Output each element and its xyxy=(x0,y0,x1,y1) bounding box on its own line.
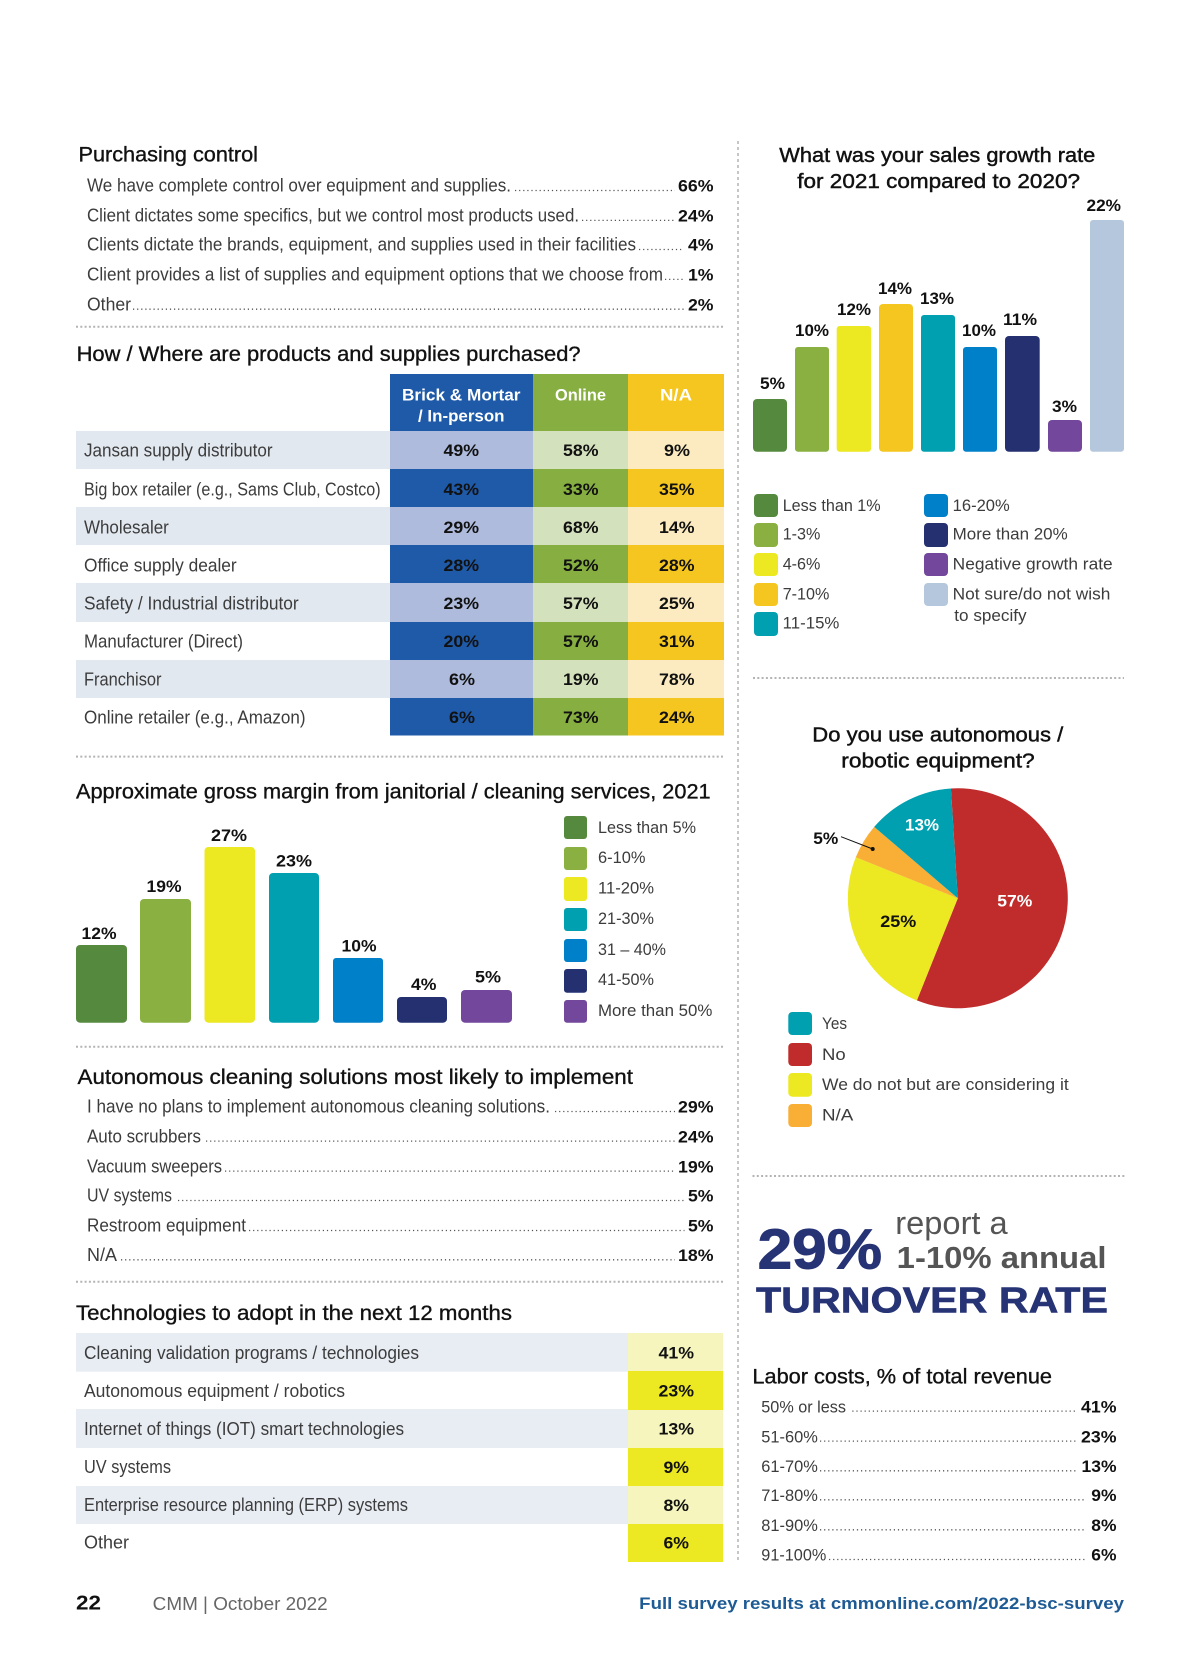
table row: wholesaler: Wholesaler xyxy=(84,518,169,538)
row: client provides a list 1%: 1% xyxy=(688,266,714,285)
legend: sales growth: 16-20% xyxy=(953,497,1010,515)
panel: labor costs xyxy=(752,1365,1116,1565)
table row: online retailer: 24% xyxy=(659,708,694,727)
panel: sales growth rate xyxy=(753,144,1124,636)
footer: issue: CMM | October 2022 xyxy=(153,1594,328,1614)
table header: brick and mortar xyxy=(390,374,533,431)
table row: wholesaler xyxy=(76,507,724,545)
legend: gross margin: More than 50% xyxy=(598,1002,713,1020)
row: n/a 18%: 18% xyxy=(678,1246,714,1265)
bar chart: gross margin: 12% xyxy=(82,924,116,943)
bar chart: gross margin: 10% xyxy=(342,937,376,956)
table row: jansan supply distributor: 49% xyxy=(444,441,479,460)
legend: autonomous equipment xyxy=(788,1012,1069,1127)
legend: sales growth xyxy=(754,494,1113,636)
table row: cleaning validation 41%: Cleaning validation programs / technologies xyxy=(84,1343,419,1363)
table row: safety / industrial distributor xyxy=(76,583,724,622)
row: 61-70% 13%: 13% xyxy=(1082,1457,1116,1476)
row: other 2%: Other xyxy=(87,294,131,314)
row: uv systems 5%: 5% xyxy=(688,1187,714,1206)
panel: gross margin xyxy=(76,780,713,1023)
bar chart: gross margin xyxy=(76,826,512,1023)
bar chart: sales growth xyxy=(753,196,1124,452)
pie chart: autonomous equipment: 57% xyxy=(997,891,1032,910)
table row: wholesaler: 68% xyxy=(563,518,598,537)
bar chart: sales growth: 12% xyxy=(837,300,871,319)
table row: office supply dealer: 28% xyxy=(659,556,694,575)
legend: gross margin: 11-20% xyxy=(598,880,654,898)
heading: purchasing control: Purchasing control xyxy=(78,143,258,166)
legend: sales growth: 4-6% xyxy=(783,556,821,574)
table row: erp systems 8%: Enterprise resource planning (ERP) systems xyxy=(84,1495,408,1515)
row: restroom equipment 5%: 5% xyxy=(688,1217,714,1236)
bar chart: sales growth: 11% xyxy=(1003,310,1037,329)
legend: sales growth: 1-3% xyxy=(783,526,821,544)
table row: big box retailer xyxy=(84,469,724,507)
heading: autonomous equipment: robotic equipment? xyxy=(841,749,1035,772)
table row: autonomous equipment 23% xyxy=(84,1371,723,1410)
row: client provides a list 1%: Client provides a list of supplies and equipment options that we choose from xyxy=(87,265,663,285)
row: 91-100% 6%: 6% xyxy=(1091,1546,1116,1565)
table header: n/a: N/A xyxy=(660,386,692,404)
row: 51-60% 23%: 23% xyxy=(1081,1427,1116,1446)
pie chart: autonomous equipment: 13% xyxy=(905,816,939,835)
bar chart: sales growth: 10% xyxy=(795,321,829,340)
pie chart: autonomous equipment: 25% xyxy=(880,912,916,931)
table row: franchisor xyxy=(76,660,724,698)
bar chart: gross margin: 4% xyxy=(411,975,436,994)
table row: big box retailer: 33% xyxy=(563,480,598,499)
row: no plans 29%: I have no plans to implement autonomous cleaning solutions. xyxy=(87,1097,550,1117)
table row: big box retailer: 43% xyxy=(444,480,479,499)
bar chart: gross margin: 5% xyxy=(475,968,501,987)
legend: gross margin: Less than 5% xyxy=(598,819,696,837)
table row: internet of things 13% xyxy=(76,1409,723,1448)
table row: safety / industrial distributor: 57% xyxy=(563,594,598,613)
row: 71-80% 9%: 9% xyxy=(1091,1486,1116,1505)
heading: sales growth rate: for 2021 compared to 2020? xyxy=(797,170,1080,193)
legend: gross margin xyxy=(564,816,713,1023)
row: client dictates some specifics 24%: Client dictates some specifics, but we control most products used. xyxy=(87,206,579,226)
legend: gross margin: 21-30% xyxy=(598,910,654,928)
table row: safety / industrial distributor: 23% xyxy=(444,594,479,613)
row: 91-100% 6%: 91-100% xyxy=(761,1547,827,1565)
table header: online xyxy=(533,374,628,431)
legend: sales growth: More than 20% xyxy=(953,526,1068,544)
table row: franchisor: Franchisor xyxy=(84,669,162,689)
table row: autonomous equipment 23%: 23% xyxy=(658,1382,694,1400)
legend: sales growth: Not sure/do not wish xyxy=(953,586,1110,604)
row: 50% or less 41%: 41% xyxy=(1081,1397,1116,1416)
heading: autonomous equipment xyxy=(812,724,1064,772)
row: clients dictate the brands 4%: Clients dictate the brands, equipment, and supplies used in their facilities xyxy=(87,235,636,255)
legend: gross margin: 6-10% xyxy=(598,849,646,867)
table row: manufacturer direct: 57% xyxy=(563,632,598,651)
panel: purchasing control xyxy=(78,143,714,314)
footer: survey link: Full survey results at cmmonline.com/2022-bsc-survey xyxy=(639,1594,1125,1613)
row: n/a 18% xyxy=(87,1245,714,1265)
table row: franchisor: 78% xyxy=(659,670,694,689)
row: no plans 29%: 29% xyxy=(678,1098,714,1117)
pie chart: autonomous equipment xyxy=(813,788,1068,1008)
bar chart: gross margin: 23% xyxy=(276,852,312,871)
bar chart: gross margin: 19% xyxy=(146,877,182,896)
legend: sales growth: Negative growth rate xyxy=(953,556,1113,574)
legend: sales growth: Less than 1% xyxy=(783,497,881,515)
legend: sales growth: 11-15% xyxy=(783,615,840,633)
legend: autonomous equipment: N/A xyxy=(822,1107,853,1125)
row: 71-80% 9% xyxy=(761,1486,1116,1505)
table row: online retailer xyxy=(84,698,724,736)
row: 81-90% 8%: 8% xyxy=(1091,1516,1116,1535)
bar chart: sales growth: 5% xyxy=(760,374,785,393)
table row: online retailer: 73% xyxy=(563,708,598,727)
callout: turnover rate xyxy=(756,1205,1108,1321)
table row: office supply dealer: Office supply dealer xyxy=(84,555,237,575)
callout: turnover rate: 29% xyxy=(758,1217,882,1281)
bar chart: sales growth: 13% xyxy=(920,289,954,308)
table row: online retailer: Online retailer (e.g., Amazon) xyxy=(84,707,306,727)
table row: erp systems 8%: 8% xyxy=(664,1496,689,1515)
row: vacuum sweepers 19% xyxy=(87,1156,714,1176)
table row: office supply dealer: 52% xyxy=(563,556,598,575)
legend: gross margin: 41-50% xyxy=(598,971,654,989)
row: restroom equipment 5%: Restroom equipment xyxy=(87,1216,246,1236)
table row: internet of things 13%: 13% xyxy=(658,1420,694,1438)
table row: uv systems 9%: UV systems xyxy=(84,1457,171,1477)
panel: how and where products are purchased xyxy=(76,343,724,736)
table row: uv systems 9% xyxy=(84,1448,723,1486)
row: 50% or less 41% xyxy=(761,1397,1116,1416)
table row: jansan supply distributor: 9% xyxy=(664,441,690,460)
bar chart: sales growth: 14% xyxy=(878,279,912,298)
row: 51-60% 23%: 51-60% xyxy=(761,1428,818,1446)
pie chart: autonomous equipment: 5% xyxy=(813,829,838,848)
table row: big box retailer: 35% xyxy=(659,480,694,499)
table row: manufacturer direct: 31% xyxy=(659,632,694,651)
row: 91-100% 6% xyxy=(761,1546,1116,1565)
table row: office supply dealer: 28% xyxy=(444,556,479,575)
table row: jansan supply distributor: 58% xyxy=(563,441,598,460)
row: vacuum sweepers 19%: Vacuum sweepers xyxy=(87,1156,222,1176)
row: other 2% xyxy=(87,294,714,314)
table row: other 6%: Other xyxy=(84,1533,129,1553)
legend: autonomous equipment: No xyxy=(822,1046,846,1064)
callout: turnover rate: 1-10% annual xyxy=(897,1240,1106,1275)
table row: safety / industrial distributor: Safety / Industrial distributor xyxy=(84,593,299,613)
table row: franchisor: 6% xyxy=(449,670,475,689)
row: 81-90% 8% xyxy=(761,1516,1116,1535)
panel: technologies to adopt xyxy=(76,1302,723,1562)
table row: cleaning validation 41%: 41% xyxy=(658,1344,694,1362)
table row: internet of things 13%: Internet of things (IOT) smart technologies xyxy=(84,1419,404,1439)
table row: manufacturer direct: Manufacturer (Direct) xyxy=(84,632,243,652)
panel: autonomous equipment pie xyxy=(788,724,1069,1127)
row: other 2%: 2% xyxy=(688,295,714,314)
bar chart: sales growth: 22% xyxy=(1086,196,1121,215)
row: auto scrubbers 24%: 24% xyxy=(678,1127,714,1146)
table header: brick and mortar: Brick & Mortar xyxy=(402,386,521,404)
row: auto scrubbers 24%: Auto scrubbers xyxy=(87,1126,201,1146)
row: uv systems 5% xyxy=(87,1186,714,1206)
bar chart: gross margin: 27% xyxy=(211,826,247,845)
row: auto scrubbers 24% xyxy=(87,1126,714,1146)
legend: sales growth: to specify xyxy=(954,607,1027,625)
row: uv systems 5%: UV systems xyxy=(87,1186,172,1206)
footer: page number: 22 xyxy=(76,1592,101,1614)
table row: safety / industrial distributor: 25% xyxy=(659,594,694,613)
row: complete control 66%: 66% xyxy=(678,177,714,196)
bar chart: sales growth: 10% xyxy=(962,321,996,340)
table row: franchisor: 19% xyxy=(563,670,598,689)
row: n/a 18%: N/A xyxy=(87,1245,117,1265)
heading: how and where: How / Where are products and supplies purchased? xyxy=(77,343,581,366)
table row: wholesaler: 29% xyxy=(444,518,479,537)
table row: jansan supply distributor: Jansan supply distributor xyxy=(84,440,273,460)
heading: autonomous equipment: Do you use autonomous / xyxy=(812,724,1064,747)
table row: erp systems 8% xyxy=(76,1486,723,1524)
table row: uv systems 9%: 9% xyxy=(664,1458,689,1477)
callout: turnover rate: TURNOVER RATE xyxy=(756,1280,1108,1321)
legend: gross margin: 31 – 40% xyxy=(598,941,666,959)
row: clients dictate the brands 4%: 4% xyxy=(688,236,714,255)
table row: autonomous equipment 23%: Autonomous equipment / robotics xyxy=(84,1381,345,1401)
table header: n/a xyxy=(628,374,724,431)
row: complete control 66%: We have complete control over equipment and supplies. xyxy=(87,176,511,196)
row: 71-80% 9%: 71-80% xyxy=(761,1487,818,1505)
table row: other 6% xyxy=(84,1524,723,1562)
legend: autonomous equipment: We do not but are considering it xyxy=(822,1076,1069,1094)
row: 61-70% 13% xyxy=(761,1457,1116,1476)
row: restroom equipment 5% xyxy=(87,1216,714,1236)
table row: online retailer: 6% xyxy=(449,708,475,727)
table row: cleaning validation 41% xyxy=(76,1333,723,1372)
heading: autonomous cleaning solutions: Autonomous cleaning solutions most likely to implement xyxy=(78,1066,633,1089)
heading: sales growth rate: What was your sales growth rate xyxy=(779,144,1095,167)
table row: manufacturer direct: 20% xyxy=(444,632,479,651)
table row: big box retailer: Big box retailer (e.g., Sams Club, Costco) xyxy=(84,480,381,500)
heading: labor costs: Labor costs, % of total revenue xyxy=(752,1365,1052,1388)
row: 61-70% 13%: 61-70% xyxy=(761,1458,818,1476)
row: 50% or less 41%: 50% or less xyxy=(761,1398,846,1416)
row: vacuum sweepers 19%: 19% xyxy=(678,1157,714,1176)
legend: sales growth: 7-10% xyxy=(783,586,830,604)
table row: office supply dealer xyxy=(84,545,724,583)
table header: brick and mortar: / In-person xyxy=(418,406,504,426)
bar chart: sales growth: 3% xyxy=(1052,397,1077,416)
heading: sales growth rate xyxy=(779,144,1095,193)
panel: autonomous cleaning solutions xyxy=(78,1066,714,1265)
table row: manufacturer direct xyxy=(84,622,724,660)
heading: technologies to adopt: Technologies to adopt in the next 12 months xyxy=(76,1302,512,1325)
table row: other 6%: 6% xyxy=(664,1534,689,1553)
table row: wholesaler: 14% xyxy=(659,518,694,537)
heading: gross margin: Approximate gross margin from janitorial / cleaning services, 2021 xyxy=(76,780,711,803)
row: 51-60% 23% xyxy=(761,1427,1116,1446)
table header: online: Online xyxy=(555,386,606,404)
row: client dictates some specifics 24%: 24% xyxy=(678,207,714,226)
row: 81-90% 8%: 81-90% xyxy=(761,1517,818,1535)
callout: turnover rate: report a xyxy=(895,1205,1008,1241)
table row: jansan supply distributor xyxy=(76,431,724,469)
legend: autonomous equipment: Yes xyxy=(822,1015,847,1033)
